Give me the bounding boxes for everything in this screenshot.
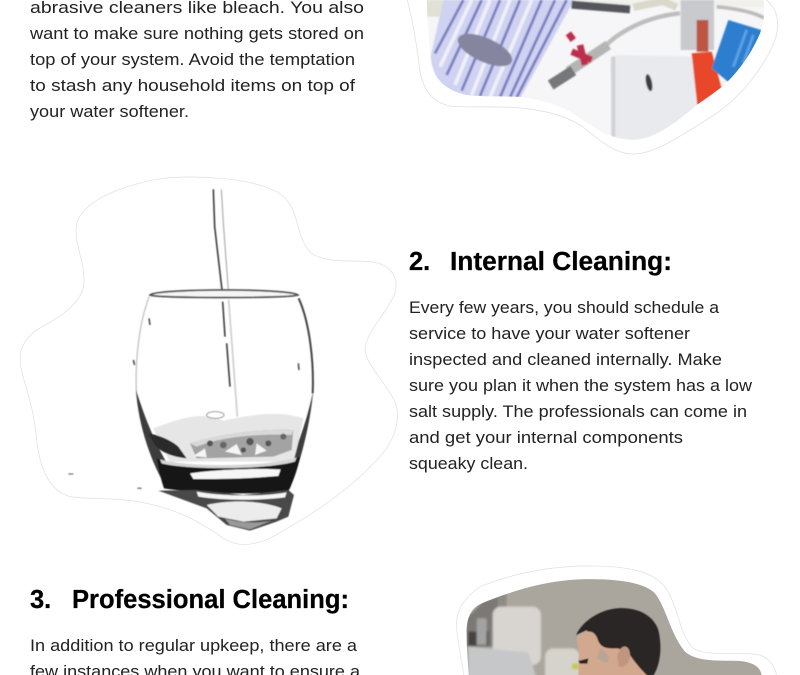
- text block: internal cleaning body: sure you plan it when the system has a low: [409, 376, 753, 395]
- text block: internal cleaning body: inspected and cleaned internally. Make: [409, 350, 722, 369]
- heading: Internal Cleaning: Internal Cleaning:: [450, 248, 672, 276]
- text block: internal cleaning body: service to have your water softener: [409, 324, 690, 343]
- text block: internal cleaning body: and get your internal components: [409, 428, 683, 447]
- blob outline: [20, 177, 397, 545]
- text block: internal cleaning body: salt supply. The professionals can come in: [409, 402, 747, 421]
- panel: top text block: your water softener.: [30, 102, 189, 121]
- panel: top text block: want to make sure nothing gets stored on: [29, 24, 364, 43]
- panel: top text block: [29, 0, 364, 121]
- image: blob with glass of water: [20, 177, 397, 545]
- panel: top text block: to stash any household items on top of: [30, 76, 355, 95]
- text block: internal cleaning body: squeaky clean.: [409, 454, 528, 473]
- heading: Internal Cleaning: 2.: [409, 248, 430, 276]
- panel: top text block: top of your system. Avoid the temptation: [30, 50, 355, 69]
- text block: professional cleaning body: [30, 636, 361, 675]
- glass: [68, 189, 313, 531]
- image: water softener filter photo: [407, 0, 778, 154]
- heading: Professional Cleaning: Professional Cleaning:: [72, 586, 349, 614]
- text block: internal cleaning body: Every few years, you should schedule a: [409, 298, 720, 317]
- text block: internal cleaning body: [409, 298, 753, 473]
- heading: Professional Cleaning: 3.: [30, 586, 51, 614]
- text block: professional cleaning body: In addition to regular upkeep, there are a: [30, 636, 358, 655]
- image: technician inspecting water softener: [456, 566, 777, 675]
